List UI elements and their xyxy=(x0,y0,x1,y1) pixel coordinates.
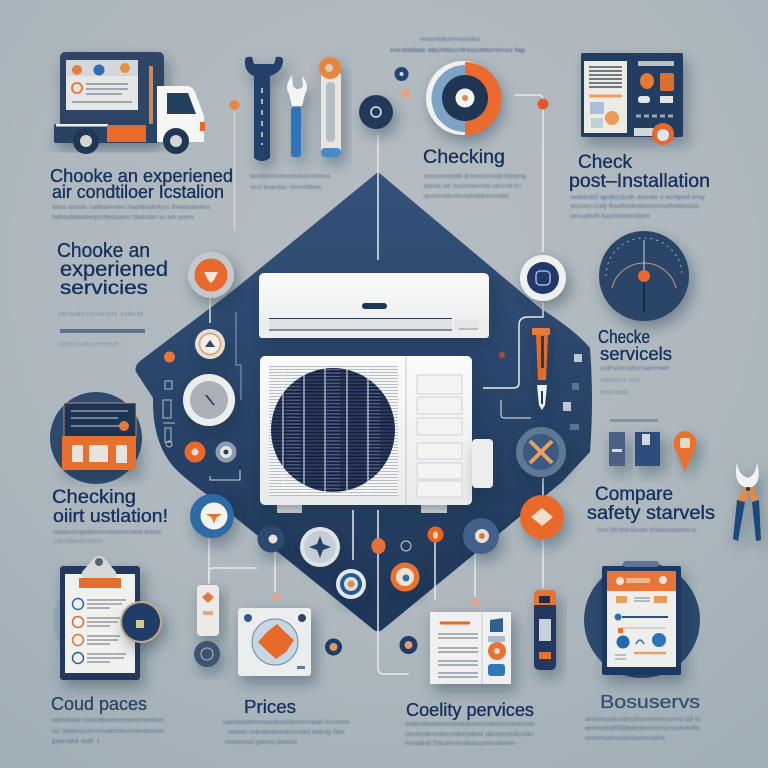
icon: screwdriver xyxy=(532,328,550,410)
text block: post-installation caption: asoocr.cndj ftscthsdrrdcosrcmdfomtsocs xyxy=(570,203,700,210)
unit divider xyxy=(405,356,407,505)
heading: check post-installation xyxy=(569,152,710,192)
checklist rows xyxy=(72,598,126,664)
text block: services left caption xyxy=(58,311,145,348)
AC display xyxy=(362,303,387,309)
fan grille xyxy=(269,366,398,496)
text block: services caption: rrdrsdc xyxy=(600,389,631,396)
heading: compare safety: Compare xyxy=(595,484,673,505)
heading: bottom right: Bosuservs xyxy=(600,692,700,712)
dark screen xyxy=(64,403,136,437)
panel: safety clipboard xyxy=(584,561,700,678)
text block: card prices caption xyxy=(52,717,164,745)
panel: prices card xyxy=(238,608,311,676)
icon: small dot right xyxy=(400,636,418,654)
text block: bottom right caption xyxy=(584,716,702,742)
text block: services left caption: nrsdcrcsrsn rdcd xyxy=(58,311,144,318)
heading: checking installation xyxy=(52,487,168,526)
text block: checking caption: aoscowcodotdl dt tovcconroddl fiotiqcng xyxy=(424,173,526,180)
icon: dark dial with connector xyxy=(359,95,393,260)
icon: map pin xyxy=(674,431,696,472)
heading: checke services xyxy=(598,327,672,364)
text block: checking caption xyxy=(424,173,526,200)
text block: truck caption: tdoo srsrds nalitsiernes hacldlsdrrtcrs theldsdwllss xyxy=(52,204,211,211)
heading: checke services: servicels xyxy=(600,344,672,364)
panel: central diamond xyxy=(136,172,592,632)
text block: tools caption: tacsdtdcomnmeocdrsdwwnoecdress xyxy=(250,173,331,180)
icon: orange diamond badge xyxy=(520,495,564,588)
icon: orange pin connector xyxy=(428,526,444,600)
icon: donut gauge xyxy=(426,61,502,135)
text block: checking caption: tdscdc bd' nsrcomenrmd cdcs'rtd tro xyxy=(424,183,521,190)
text block: checking caption: qnorcrcdsnhcrsdnddrsncmhis xyxy=(424,193,510,200)
text block: quality services caption: onsrcdrsrdcncdrcsdnd dicsmsrdcsdn xyxy=(405,731,534,738)
icon: wrench xyxy=(245,57,283,161)
heading: checking installation: oiirt ustlation! xyxy=(53,506,168,526)
connector: indoor line xyxy=(483,302,543,388)
panel: checking card xyxy=(50,392,142,484)
unit body xyxy=(260,356,472,505)
text block: top caption: nmcmtdcrimoslsdss xyxy=(420,36,481,43)
truck chassis xyxy=(54,124,158,143)
text block: bottom right caption: ansdmsdcsdrcdsnrnmnmcrnd cd ts xyxy=(585,716,702,723)
heading: compare safety: safety starvels xyxy=(587,503,715,524)
connector: donut to ring xyxy=(514,95,548,252)
text block: top caption xyxy=(390,36,525,54)
clipboard clip xyxy=(79,556,121,588)
icon: ring dot xyxy=(336,569,366,599)
truck poster xyxy=(66,60,138,110)
text block: post-installation caption xyxy=(570,194,706,220)
icon: blue round connector xyxy=(463,518,499,606)
icon: small glyph xyxy=(401,541,411,551)
panel: service book xyxy=(430,612,511,684)
icon: dark dot connector xyxy=(258,526,284,601)
icons: small glyphs left xyxy=(163,381,175,447)
unit feet xyxy=(277,503,447,513)
truck cargo box xyxy=(60,52,164,130)
icon: tester tool xyxy=(319,57,341,157)
orange case xyxy=(62,436,136,470)
truck orange strip xyxy=(149,66,153,130)
icon: star dial xyxy=(300,527,340,567)
book icons xyxy=(488,618,506,676)
connector: lower bracket xyxy=(501,400,531,418)
icon: small dot xyxy=(325,638,342,656)
heading: experienced installation xyxy=(50,166,233,202)
heading: experienced services: servicies xyxy=(60,278,148,299)
icons: small markers near donut xyxy=(394,67,410,98)
heading: check post-installation: post–Installation xyxy=(569,171,710,192)
heading: prices: Prices xyxy=(244,697,296,717)
icon: left dial xyxy=(183,374,235,426)
clip xyxy=(623,561,659,567)
text block: prices caption: mmwn crdcddcdsnrdcrcrcdsl mhrcfy fam xyxy=(228,729,344,736)
icons: spec documents xyxy=(609,419,660,466)
truck cab xyxy=(157,86,204,142)
heading: card prices: Coud paces xyxy=(51,694,147,714)
heading: checking installation: Checking xyxy=(52,487,136,508)
icons: left lower dots xyxy=(184,442,236,462)
icon: spanner xyxy=(287,75,307,157)
text block: quality services caption xyxy=(405,721,536,747)
valve cover xyxy=(472,439,493,488)
text block: bottom right caption: omrmsdncrdcdsnmsdnc xyxy=(585,735,666,742)
text block: compare caption: Cn/cr Dhi fldcb famstdc sFoibdroccdsdcms rp xyxy=(597,527,696,534)
heading: experienced installation: air condtiloer Icstalion xyxy=(52,182,224,202)
icons: small glyphs right xyxy=(563,354,582,430)
panel: clipboard checklist xyxy=(53,556,162,680)
orange badge xyxy=(652,123,674,145)
text block: card prices caption: otdsdstnt tsmcdtsrmcrcrdmrrsmtsm xyxy=(52,717,164,724)
heading: experienced services xyxy=(57,240,168,299)
heading: experienced installation: Chooke an experiened xyxy=(50,166,233,186)
paper content xyxy=(607,591,676,667)
text block: post-installation caption: ovdstrdsf qpdbcctcdn aronds o ecrllpnrt ersy xyxy=(570,194,706,201)
compass badge xyxy=(120,601,162,643)
text block: post-installation caption: onsodsflf bacdomhrfdinn xyxy=(570,213,650,220)
text block: quality services caption: mnsdnd Sacdrnrcrdcdscrmrcdsnrn xyxy=(405,740,515,747)
panel: outdoor AC unit xyxy=(260,356,493,513)
icon: handheld tester xyxy=(534,590,556,670)
text block: top caption: vocdaldatc obcrtdscrdrsocdmcrmccs fap xyxy=(390,47,525,54)
text block: truck caption: hafrdsdiddsdrespcrtlyrdsasco Idedsdan au arb unons xyxy=(52,214,195,221)
truck wheels xyxy=(73,128,99,154)
text block: card prices caption: oc' bddsscrtsncrsdcrdscrmtndtsnsn xyxy=(52,728,164,735)
icon: tools badge xyxy=(516,427,566,495)
board widgets xyxy=(634,61,676,136)
fan xyxy=(271,366,395,494)
heading: experienced services: experiened xyxy=(60,258,168,281)
text block: card prices caption: ppndd sdr r xyxy=(52,738,101,745)
heading: checke services: Checke xyxy=(598,327,650,347)
connector: left bracket xyxy=(210,470,240,480)
connector: bottom line xyxy=(353,510,409,674)
heading: experienced services: Chooke an xyxy=(57,240,150,262)
text block: tools caption: ocst bsacdac rdsmcfdsnc xyxy=(250,184,323,191)
text block: services caption xyxy=(600,365,671,396)
text block: checking installation caption xyxy=(53,529,162,545)
panel: truck xyxy=(54,52,205,154)
text block: services caption: udrsocsdcrsanmer xyxy=(600,365,671,372)
text block: quality services caption: osdsrdhcdcmnrstsdcdsmrsrcdsnctsrdnmrcds xyxy=(405,721,536,728)
heading: checking: Checking xyxy=(423,147,505,168)
connector: left hook xyxy=(236,312,241,400)
text block: truck caption xyxy=(52,204,211,221)
text block: checking installation caption: cadasrdrcpcrdcrsmcrdoscmrsdnd dracrs xyxy=(53,529,162,536)
icon: orange ring dot xyxy=(390,562,420,592)
text block: services caption: dddtdrs rdn xyxy=(600,377,640,384)
icon: ring badge xyxy=(520,255,566,301)
icon: remote and dial xyxy=(194,568,257,667)
text block: tools caption xyxy=(250,173,331,191)
text block: prices caption xyxy=(223,719,351,746)
side vents xyxy=(417,375,462,497)
heading: quality services: Coelity pervices xyxy=(406,700,534,720)
icon: blue badge xyxy=(190,494,234,584)
icon: orange service badge xyxy=(188,252,234,323)
orange header xyxy=(607,571,676,591)
text block: prices caption: rmdoncmw (pdrsun pdsndsl xyxy=(225,739,297,746)
text block: bottom right caption: wmrcdcdl5lDbdrdomrmrscrscm/n/fri xyxy=(584,725,699,732)
icon: large gauge xyxy=(599,231,689,321)
AC louver xyxy=(259,318,489,338)
text block: services left caption: rdsrsdcrmcd xyxy=(58,341,119,348)
clipboard paper xyxy=(65,574,135,673)
panel: indoor AC unit xyxy=(259,273,489,338)
heading: compare safety xyxy=(587,484,715,524)
report paper xyxy=(584,61,627,133)
book lines xyxy=(438,623,478,677)
icon: pliers xyxy=(733,462,761,541)
heading: check post-installation: Check xyxy=(578,152,632,173)
panel: report board xyxy=(581,53,683,145)
connector pin left xyxy=(230,100,240,230)
icon: orange dot xyxy=(164,352,175,362)
icon: round badge left xyxy=(195,329,225,359)
icon: red dot xyxy=(499,352,505,358)
text block: checking installation caption: cdcrdsncrsmn xyxy=(53,538,103,545)
text block: prices caption: uatsdcbcdrnmmasdcdrsdcmcrmasdc lsrsmcnc xyxy=(223,719,351,726)
